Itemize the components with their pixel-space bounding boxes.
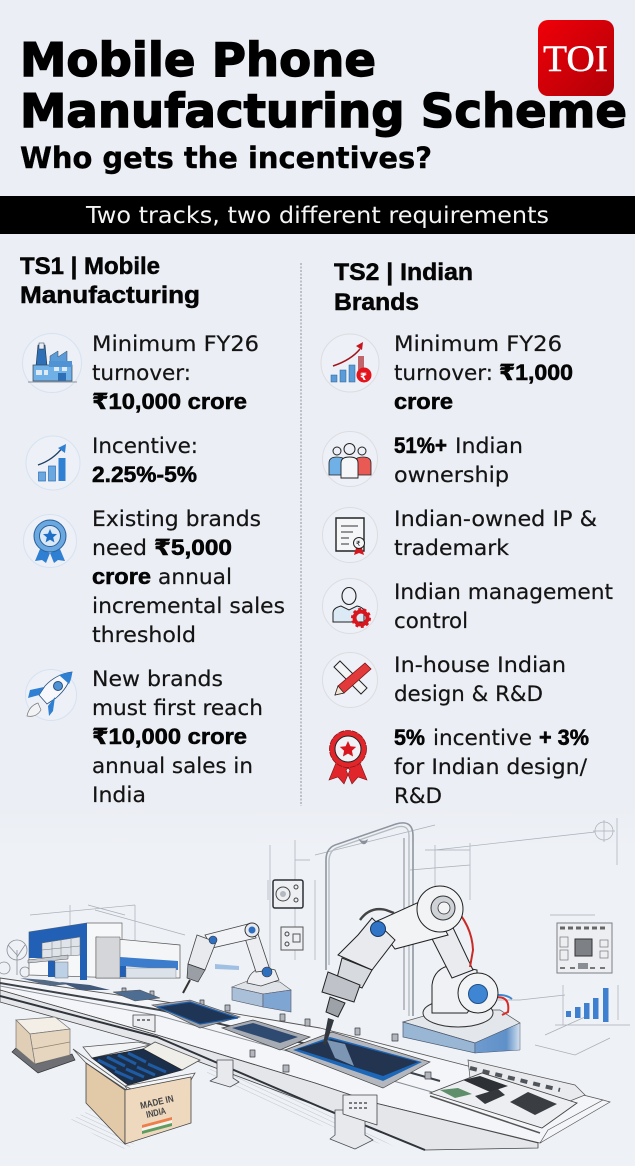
text: IP and trademark: trademark bbox=[394, 536, 510, 560]
circuit boards on conveyor bbox=[430, 1060, 610, 1143]
text: IP and trademark bbox=[394, 507, 597, 560]
text: new brands: annual sales in bbox=[92, 754, 253, 778]
text: minimum turnover: crore bbox=[394, 389, 453, 414]
text: existing brands: need bbox=[92, 536, 147, 560]
heading: TS2 bbox=[334, 259, 473, 316]
text: management control: Indian management bbox=[394, 580, 613, 604]
icon: blue medal bbox=[24, 514, 76, 568]
text: IP and trademark: Indian-owned IP & bbox=[394, 507, 597, 531]
title: Manufacturing Scheme bbox=[20, 84, 627, 138]
text: incentive bbox=[92, 434, 198, 487]
text: incentive: for Indian design/ bbox=[394, 755, 588, 779]
icon: people bbox=[322, 432, 378, 486]
heading: TS2: Brands bbox=[334, 289, 419, 316]
divider bbox=[300, 263, 302, 806]
text: incentive: + 3% bbox=[539, 725, 589, 750]
text: minimum turnover: Minimum FY26 bbox=[92, 332, 259, 356]
icon: factory bbox=[22, 334, 82, 392]
text: existing brands: ₹5,000 bbox=[154, 535, 232, 560]
bar chart sketch bbox=[566, 988, 608, 1022]
icon: rupee chart bbox=[321, 334, 379, 392]
icon: growth chart bbox=[26, 436, 80, 490]
text: minimum turnover bbox=[394, 332, 573, 414]
text: ownership: ownership bbox=[394, 463, 509, 487]
robot arm large bbox=[322, 886, 520, 1053]
phones on conveyor bbox=[20, 978, 430, 1088]
panel: TS2 Indian Brands bbox=[321, 259, 613, 808]
text: design and R&D: design & R&D bbox=[394, 682, 543, 706]
text: minimum turnover: ₹10,000 crore bbox=[92, 389, 247, 414]
title: Mobile Phone bbox=[20, 33, 376, 87]
text: existing brands: threshold bbox=[92, 623, 196, 647]
subtitle: Who gets the incentives? bbox=[20, 141, 432, 175]
icon: ruler and pencil bbox=[322, 652, 378, 708]
text: incentive: 5% bbox=[394, 725, 425, 750]
text: incentive: 2.25%-5% bbox=[92, 462, 197, 487]
text: new brands bbox=[92, 667, 263, 807]
illustration: factory assembly line bbox=[0, 818, 630, 1150]
icon: red medal bbox=[329, 730, 367, 784]
trees bbox=[0, 940, 30, 977]
icon: rupee chart: ₹ bbox=[360, 372, 367, 383]
cardboard box Made in India bbox=[73, 1042, 200, 1144]
text: minimum turnover: Minimum FY26 bbox=[394, 332, 562, 356]
robot arm small bbox=[183, 923, 291, 1012]
text: existing brands bbox=[92, 507, 285, 647]
text: new brands: ₹10,000 crore bbox=[92, 724, 247, 749]
chips sketch left bbox=[273, 880, 303, 950]
text: existing brands: annual bbox=[158, 565, 232, 589]
icon: certificate bbox=[322, 508, 378, 562]
icon: manager and gear bbox=[322, 578, 378, 634]
conveyor legs bbox=[210, 1060, 373, 1149]
heading: TS1 bbox=[20, 253, 200, 309]
text: new brands: New brands bbox=[92, 667, 223, 691]
text: ownership: Indian bbox=[455, 434, 523, 458]
panel: TS1 Mobile Manufacturing bbox=[20, 253, 285, 807]
text: existing brands: incremental sales bbox=[92, 594, 285, 618]
text: management control bbox=[394, 580, 613, 633]
text: incentive bbox=[394, 725, 589, 808]
floor hatching bbox=[70, 1062, 400, 1150]
text: incentive: Incentive: bbox=[92, 434, 198, 458]
cardboard box Made in India: MADE IN bbox=[139, 1094, 175, 1112]
text: design and R&D: In-house Indian bbox=[394, 653, 566, 677]
text: minimum turnover bbox=[92, 332, 259, 414]
text: incentive: R&D bbox=[394, 784, 442, 808]
banner: Two tracks, two different requirements bbox=[85, 203, 549, 229]
icon: TOI logo: TOI bbox=[543, 39, 608, 80]
blueprint lines bbox=[30, 818, 630, 1055]
icon: rocket bbox=[26, 670, 76, 720]
text: minimum turnover: turnover: bbox=[92, 361, 191, 385]
icon: TOI logo bbox=[538, 20, 614, 96]
title bbox=[20, 33, 627, 138]
heading: TS1: TS1 | Mobile bbox=[20, 253, 160, 280]
text: new brands: India bbox=[92, 783, 146, 807]
text: minimum turnover: turnover: bbox=[394, 361, 493, 385]
factory building bbox=[28, 923, 239, 980]
large phone outline bbox=[326, 823, 413, 1016]
icon: certificate: ₹ bbox=[356, 540, 361, 548]
text: existing brands: crore bbox=[92, 564, 151, 589]
text: ownership: 51%+ bbox=[394, 433, 447, 458]
banner bbox=[0, 196, 635, 234]
text: management control: control bbox=[394, 609, 468, 633]
conveyor bolts bbox=[122, 988, 431, 1079]
heading: TS2: TS2 | Indian bbox=[334, 259, 473, 286]
conveyor belt bbox=[0, 978, 603, 1150]
text: minimum turnover: ₹1,000 bbox=[499, 360, 573, 385]
text: ownership bbox=[394, 433, 523, 487]
text: incentive: incentive bbox=[433, 726, 532, 750]
cardboard box Made in India: INDIA bbox=[145, 1106, 167, 1121]
text: existing brands: Existing brands bbox=[92, 507, 261, 531]
circuit board chip top right bbox=[557, 923, 612, 973]
text: new brands: must first reach bbox=[92, 696, 263, 720]
heading: TS1: Manufacturing bbox=[20, 282, 200, 309]
text: design and R&D bbox=[394, 653, 566, 706]
small boxes on pallet bbox=[12, 1017, 75, 1073]
